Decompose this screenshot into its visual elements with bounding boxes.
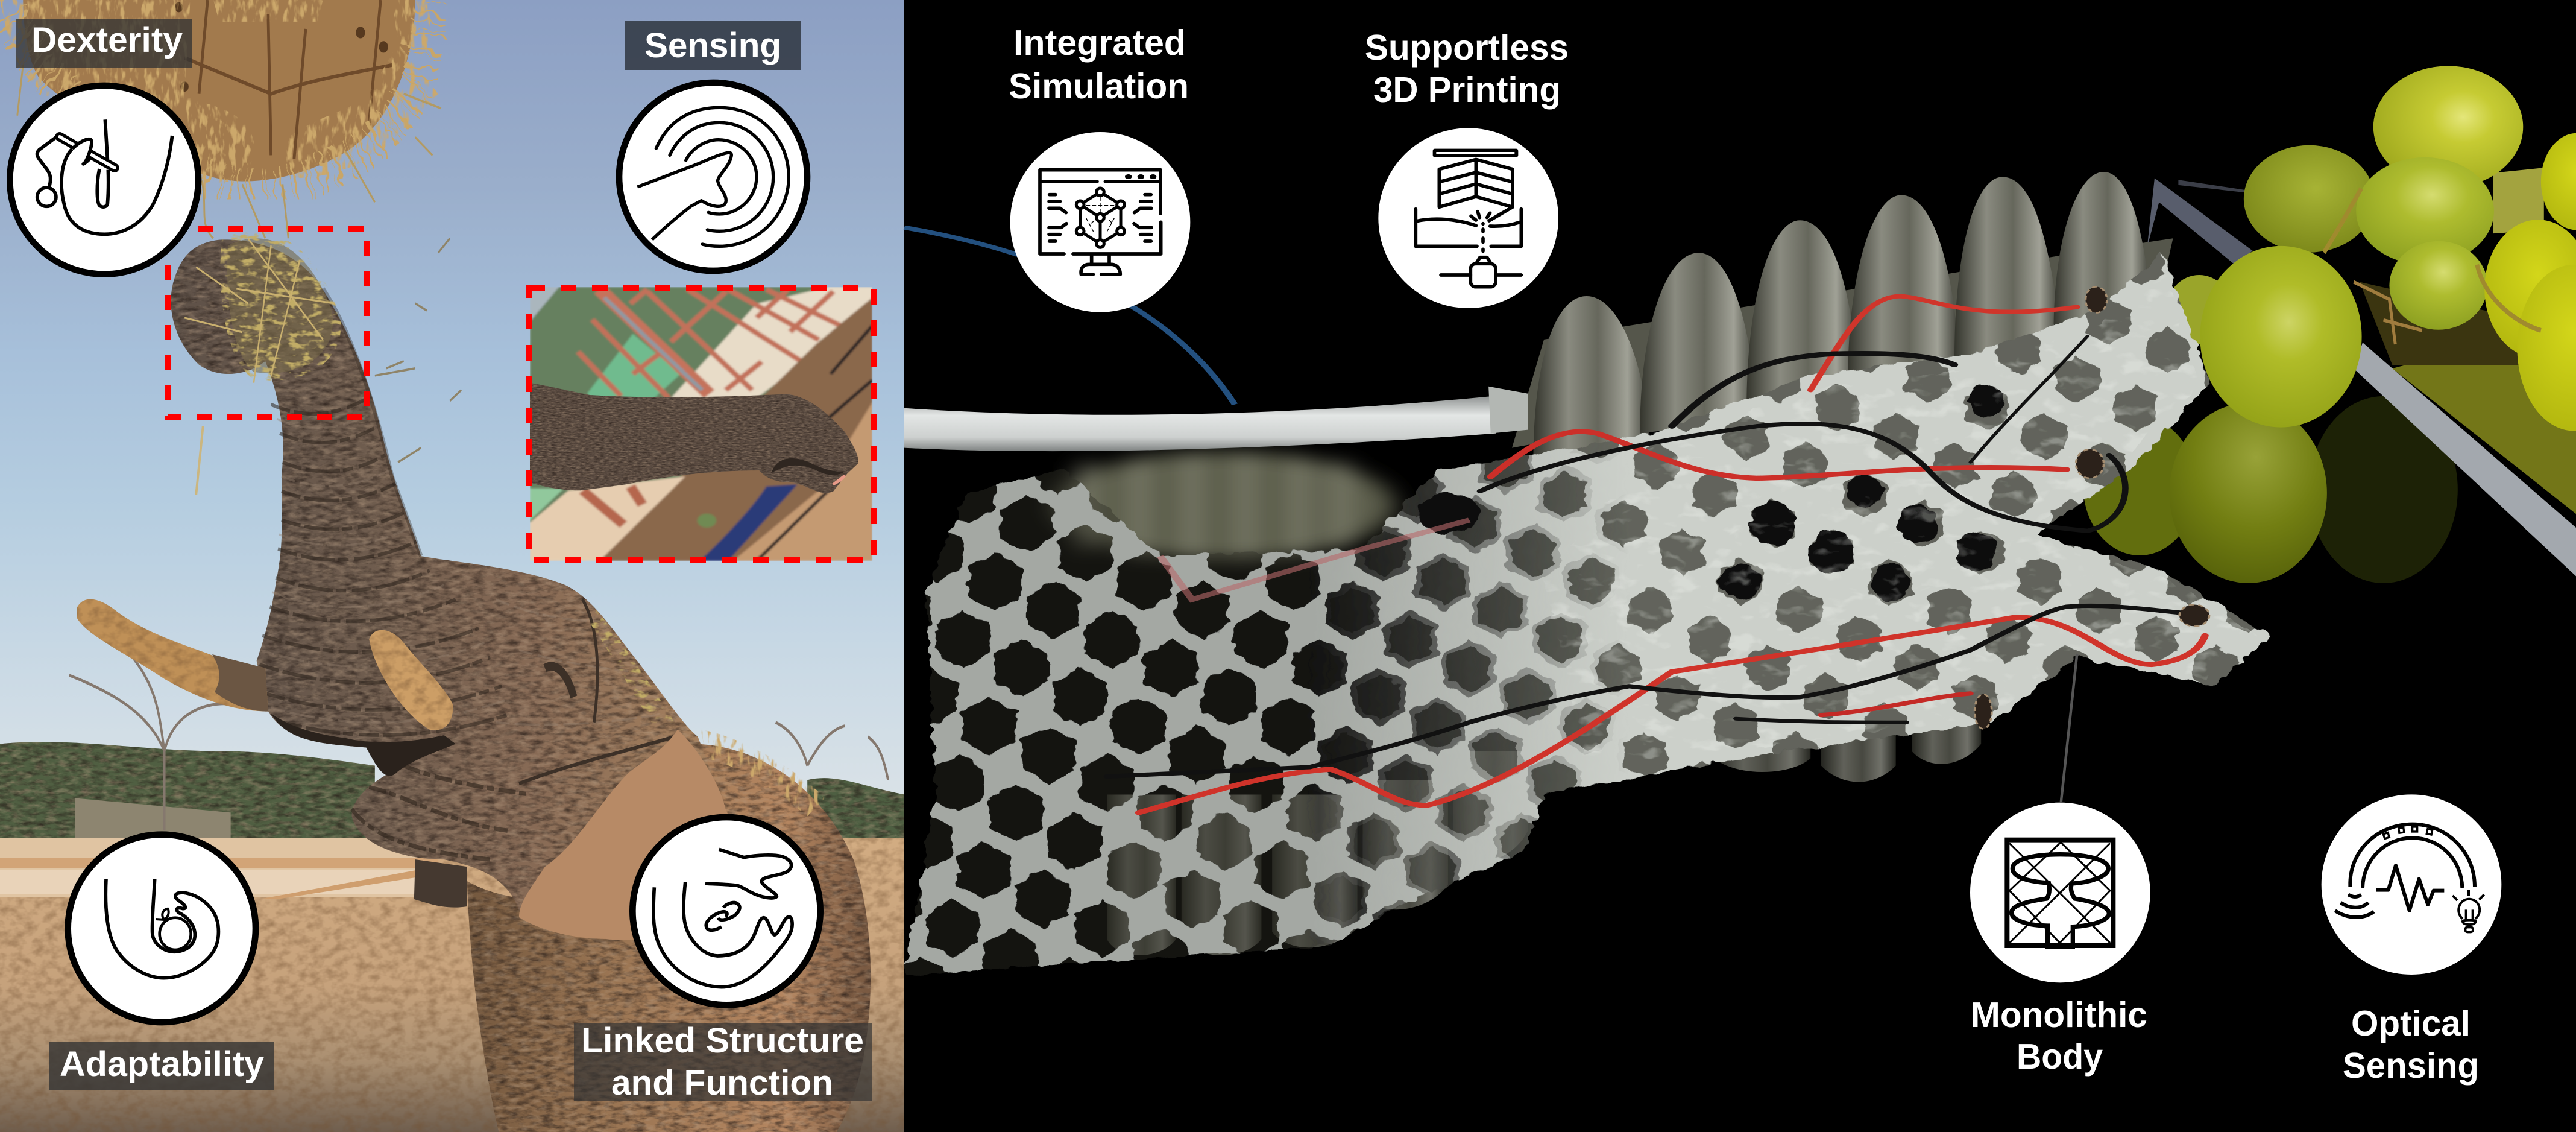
heading: Supportless 3D Printing: [1365, 28, 1569, 110]
red dashed box: trunk tip: [168, 229, 367, 417]
icon: optical sensing: [2322, 794, 2501, 975]
photo: hay feeder ball: [0, 0, 441, 238]
thin lead: [2061, 654, 2077, 802]
label: Monolithic Body: Monolithic: [1971, 995, 2147, 1035]
photo: eye and wrinkles: [519, 599, 675, 783]
heading: Supportless 3D Printing: 3D Printing: [1373, 70, 1561, 110]
dark lattice holes: [1418, 385, 2004, 600]
photo: hay on head: [588, 607, 675, 723]
photo: mouth: [271, 713, 456, 776]
upper-left bellows: [1054, 452, 1395, 560]
label: Optical Sensing: Optical: [2351, 1004, 2471, 1043]
photo: elephant head and trunk: [171, 239, 725, 910]
label: Monolithic Body: [1971, 995, 2147, 1077]
faded wire under lattice: [1160, 520, 1469, 599]
photo: neck shadow: [414, 859, 467, 908]
inset photo: trunk grasping detail: [530, 287, 872, 561]
red dashed box: inset: [529, 288, 874, 560]
acrylic tray edges: [2147, 178, 2253, 265]
upper bellows lobes: [1512, 172, 2173, 463]
label: Dexterity: Dexterity: [31, 21, 183, 60]
honeycomb lattice: [904, 253, 2269, 975]
label: Sensing: Sensing: [644, 26, 781, 65]
label: Linked Structure and Function: and Function: [611, 1063, 833, 1102]
icon: integrated simulation: [1010, 132, 1190, 312]
tray reflection: [2392, 341, 2576, 514]
icon: monolithic body: [1970, 803, 2150, 982]
photo: actuator: [904, 172, 2269, 975]
heading: Integrated Simulation: Simulation: [1009, 66, 1189, 106]
heading: Integrated Simulation: [1009, 23, 1189, 106]
heading: Integrated Simulation: Integrated: [1013, 23, 1186, 63]
label: Linked Structure and Function: Linked Structure: [581, 1021, 864, 1060]
tube: [904, 396, 1496, 451]
photo: hay on back: [701, 730, 825, 816]
photo: far trees: [0, 654, 904, 845]
icon: supportless 3D printing: [1378, 128, 1558, 308]
icon: adaptability: [68, 835, 256, 1022]
sensor terminals: [1975, 286, 2209, 729]
photo: sandy ground and wall: [0, 838, 904, 1132]
icon: sensing: [619, 83, 807, 271]
photo: grapes and acrylic tray: [2083, 66, 2576, 583]
photo: left tusk: [77, 599, 268, 712]
stems and back grape: [2493, 168, 2544, 233]
photo: sky: [0, 0, 904, 845]
photo: right tusk: [369, 630, 453, 730]
icon: linked structure: [632, 817, 820, 1005]
label: Linked Structure and Function: [574, 1021, 872, 1102]
wires: [1107, 296, 2205, 812]
panel: elephant photograph: [0, 0, 904, 1132]
photo: hay in trunk tip: [184, 232, 461, 495]
blue wire: [904, 227, 1235, 405]
label: Optical Sensing: Sensing: [2343, 1046, 2479, 1086]
label: Monolithic Body: Body: [2017, 1037, 2103, 1077]
lower bellows lobes: [1107, 686, 1981, 955]
panel: black background with soft actuator photo: [904, 0, 2576, 1132]
photo: elephant body: [467, 744, 871, 1132]
photo: trunk wrinkles: [259, 289, 658, 859]
label: Adaptability: Adaptability: [60, 1045, 264, 1084]
heading: Supportless 3D Printing: Supportless: [1365, 28, 1569, 68]
label: Optical Sensing: [2343, 1004, 2479, 1086]
label: Sensing: [625, 21, 801, 70]
photo: ear: [519, 730, 732, 940]
icon: dexterity: [10, 86, 198, 274]
label: Dexterity: [16, 19, 192, 68]
lattice highlights: [1544, 267, 2258, 766]
